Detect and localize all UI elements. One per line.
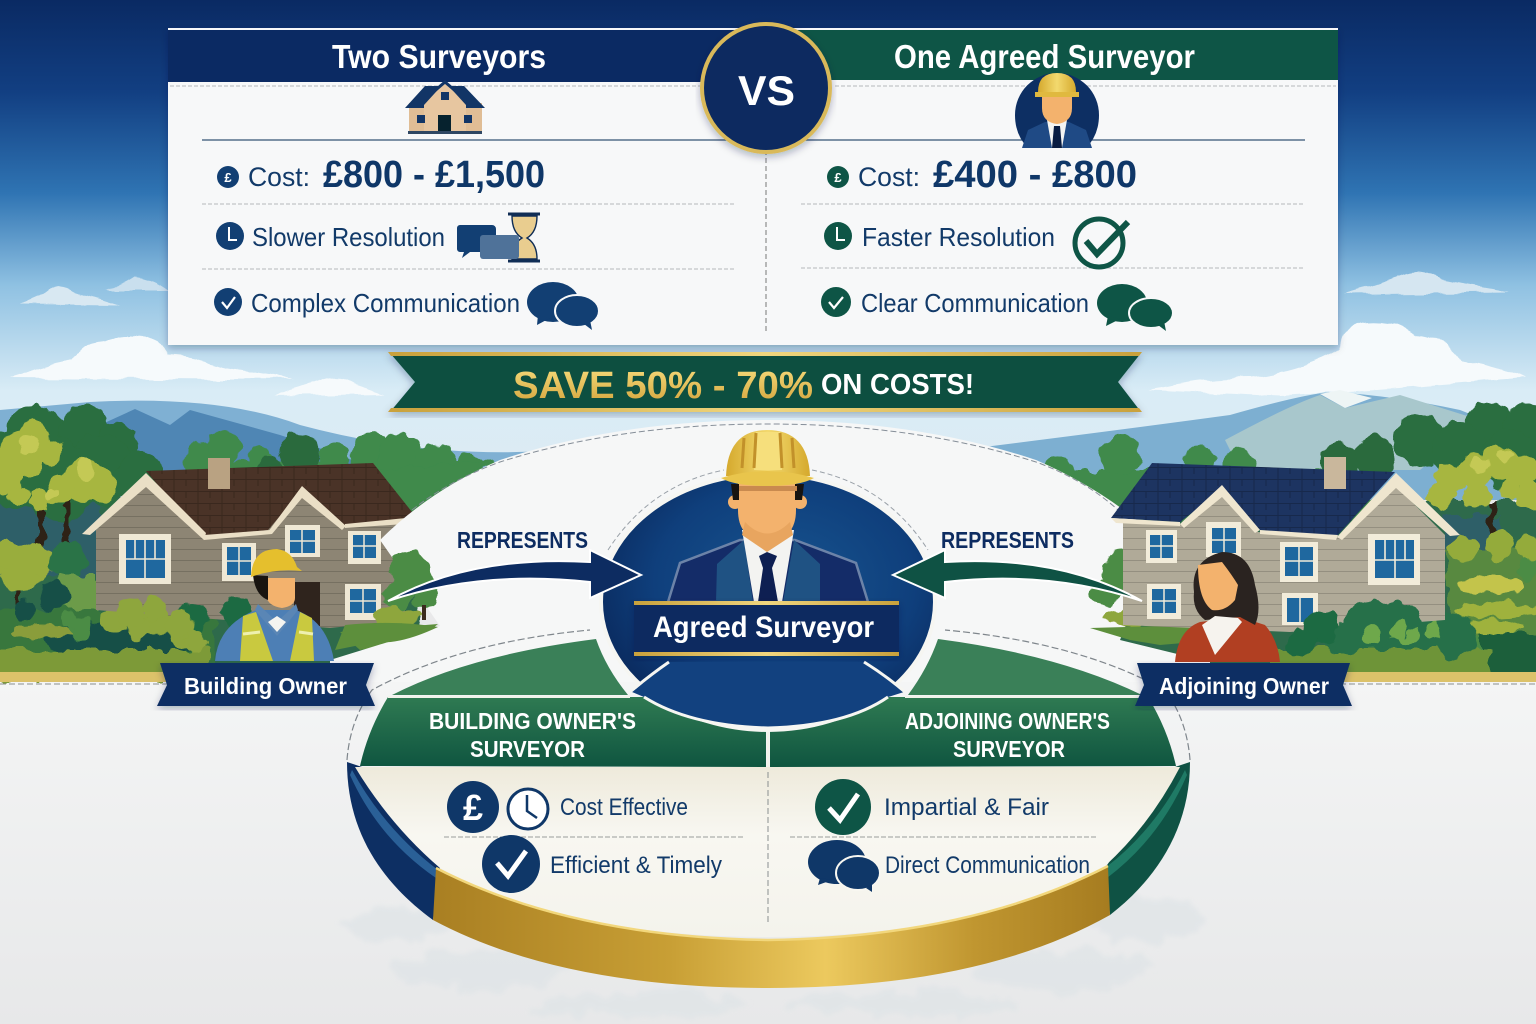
row: cost left: Cost: [248, 162, 310, 192]
building owner banner [157, 663, 375, 706]
disc left heading: SURVEYOR [470, 736, 585, 762]
upper left green arc [392, 639, 628, 695]
central navy disc [601, 470, 935, 730]
icon: large green check [1075, 219, 1128, 267]
disc right heading: ADJOINING OWNER'S [905, 708, 1110, 734]
agreed surveyor label [634, 601, 899, 656]
benefit: cost effective [447, 781, 688, 833]
arrow: adjoining owner represents [893, 550, 1142, 601]
row: complex communication: Complex Communication [251, 288, 520, 318]
savings banner [388, 352, 1142, 412]
agreed surveyor label: Agreed Surveyor [653, 611, 874, 644]
row: clear communication: Clear Communication [861, 288, 1089, 318]
benefit: impartial and fair [815, 779, 1049, 835]
disc left heading: BUILDING OWNER'S [429, 708, 636, 734]
row: cost left [217, 154, 545, 196]
VS badge [702, 24, 830, 152]
row: cost left: £800 - £1,500 [323, 154, 545, 196]
left landscape: trees and bushes [0, 404, 497, 680]
adjoining owner banner [1135, 663, 1352, 706]
benefit: direct communication: Direct Communication [885, 852, 1090, 879]
disc left heading [429, 708, 636, 762]
label: represents right: REPRESENTS [941, 527, 1074, 553]
adjoining owner figure [1175, 552, 1280, 662]
disc right heading [905, 708, 1110, 762]
arrow: building owner represents [388, 550, 641, 601]
gold road strip right [1340, 672, 1536, 682]
left house [82, 458, 438, 650]
building owner figure [215, 549, 334, 661]
savings banner: SAVE 50% - 70% [513, 365, 813, 407]
row: cost right [827, 154, 1137, 196]
benefit: cost effective: Cost Effective [560, 794, 688, 821]
comparison panel [168, 28, 1338, 345]
disc side: navy [347, 762, 440, 920]
disc side: green [1105, 762, 1190, 915]
right landscape: trees and bushes [1030, 401, 1536, 680]
icon: chat and hourglass [457, 214, 540, 261]
row: cost right: £ [834, 170, 842, 185]
clouds right [1150, 272, 1525, 396]
row: slower resolution: Slower Resolution [252, 222, 445, 252]
header: two surveyors [168, 30, 770, 82]
dome dashed edge [412, 424, 1118, 510]
row: faster resolution: Faster Resolution [862, 222, 1055, 252]
benefit: efficient and timely [482, 835, 722, 893]
row: cost right: Cost: [858, 162, 920, 192]
building owner banner: Building Owner [184, 673, 347, 699]
white dome background [330, 420, 1210, 682]
savings banner: ON COSTS! [821, 369, 974, 401]
gold road strip left [0, 672, 170, 682]
clouds left [8, 277, 385, 396]
adjoining owner banner: Adjoining Owner [1159, 673, 1329, 699]
row: cost right: £400 - £800 [933, 154, 1137, 196]
mountains left [0, 401, 560, 500]
disc top face [355, 767, 1180, 937]
3D disc [347, 630, 1190, 988]
benefit: impartial and fair: Impartial & Fair [884, 794, 1049, 821]
right shrub beside house [1090, 552, 1195, 645]
icon: chat bubbles right [1097, 284, 1173, 331]
right house [1111, 457, 1460, 656]
label: represents left: REPRESENTS [457, 527, 588, 553]
header: one agreed surveyor: One Agreed Surveyor [894, 38, 1195, 75]
icon: surveyor badge [1015, 73, 1099, 148]
disc right heading: SURVEYOR [953, 736, 1065, 762]
right green panel [770, 697, 1176, 767]
ground [0, 682, 1536, 1024]
large agreed surveyor figure [668, 430, 868, 602]
VS badge: VS [738, 67, 795, 114]
sky background [0, 0, 1536, 460]
left green panel [360, 697, 766, 767]
icon: chat bubbles left [527, 282, 599, 330]
header: one agreed surveyor [770, 30, 1338, 80]
header: two surveyors: Two Surveyors [332, 38, 546, 75]
left shrub beside house [335, 550, 438, 650]
benefit: direct communication [808, 840, 1090, 892]
disc rim: gold [433, 866, 1110, 988]
mist around the disc [345, 898, 1205, 1017]
row: cost left: £ [224, 170, 232, 185]
mountains right [960, 390, 1536, 500]
benefit: efficient and timely: Efficient & Timely [550, 852, 722, 879]
upper right green arc [908, 639, 1142, 695]
benefit: cost effective: £ [463, 787, 483, 828]
icon: house [405, 82, 485, 134]
